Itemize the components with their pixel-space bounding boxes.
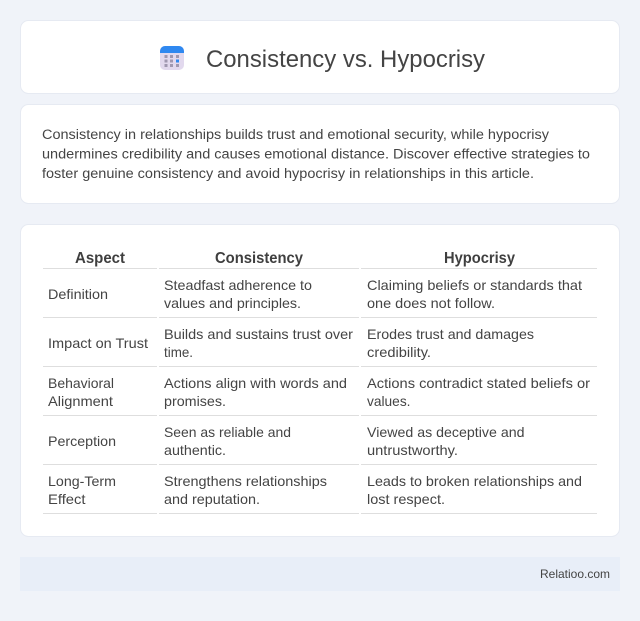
row: behavioral alignment: Actions contradict stated beliefs or xyxy=(367,375,590,391)
table header row: Aspect xyxy=(75,250,125,267)
header panel xyxy=(20,20,620,94)
row: perception: authentic. xyxy=(164,442,226,458)
row: impact on trust: Erodes trust and damages xyxy=(367,326,534,342)
intro text: Consistency in relationships builds trust and emotional security, while hypocrisy xyxy=(42,127,550,143)
row: impact on trust: credibility. xyxy=(367,344,431,360)
row: behavioral alignment: promises. xyxy=(164,393,226,409)
row: long-term effect: Long-Term xyxy=(48,473,116,489)
row: definition: values and principles. xyxy=(164,295,301,311)
row: behavioral alignment: values. xyxy=(367,393,410,409)
table header row: Consistency xyxy=(215,250,303,267)
row: impact on trust xyxy=(48,326,534,360)
row: behavioral alignment xyxy=(48,375,590,409)
row: impact on trust: Impact on Trust xyxy=(48,335,148,351)
comparison table panel xyxy=(20,224,620,536)
row: long-term effect: Strengthens relationships xyxy=(164,473,327,489)
row: definition: Steadfast adherence to xyxy=(164,277,312,293)
row: behavioral alignment: Alignment xyxy=(48,393,113,409)
row: behavioral alignment: Behavioral xyxy=(48,375,114,391)
row: long-term effect xyxy=(48,473,582,507)
intro panel xyxy=(20,104,620,204)
row: definition xyxy=(48,277,582,311)
row: long-term effect: and reputation. xyxy=(164,491,260,507)
row: behavioral alignment: Actions align with words and xyxy=(164,375,347,391)
intro text xyxy=(42,127,590,182)
row: perception: Viewed as deceptive and xyxy=(367,424,524,440)
row: perception xyxy=(48,424,524,458)
row: definition: Claiming beliefs or standards that xyxy=(367,277,582,293)
row: perception: untrustworthy. xyxy=(367,442,458,458)
row: impact on trust: time. xyxy=(164,344,193,360)
row: perception: Seen as reliable and xyxy=(164,424,291,440)
footer bar xyxy=(20,557,620,591)
row: definition: Definition xyxy=(48,286,108,302)
row: long-term effect: Leads to broken relationships and xyxy=(367,473,582,489)
table header row xyxy=(75,250,515,267)
footer credit: Relatioo.com xyxy=(540,567,610,581)
row: perception: Perception xyxy=(48,433,116,449)
row: long-term effect: lost respect. xyxy=(367,491,445,507)
title: Consistency vs. Hypocrisy xyxy=(206,46,485,73)
intro text: undermines credibility and causes emotional distance. Discover effective strategies to xyxy=(42,146,590,162)
table header row: Hypocrisy xyxy=(444,250,515,267)
row: definition: one does not follow. xyxy=(367,295,495,311)
icon: calendar xyxy=(160,46,184,70)
row: impact on trust: Builds and sustains trust over xyxy=(164,326,353,342)
intro text: foster genuine consistency and avoid hypocrisy in relationships in this article. xyxy=(42,166,534,182)
row: long-term effect: Effect xyxy=(48,491,86,507)
